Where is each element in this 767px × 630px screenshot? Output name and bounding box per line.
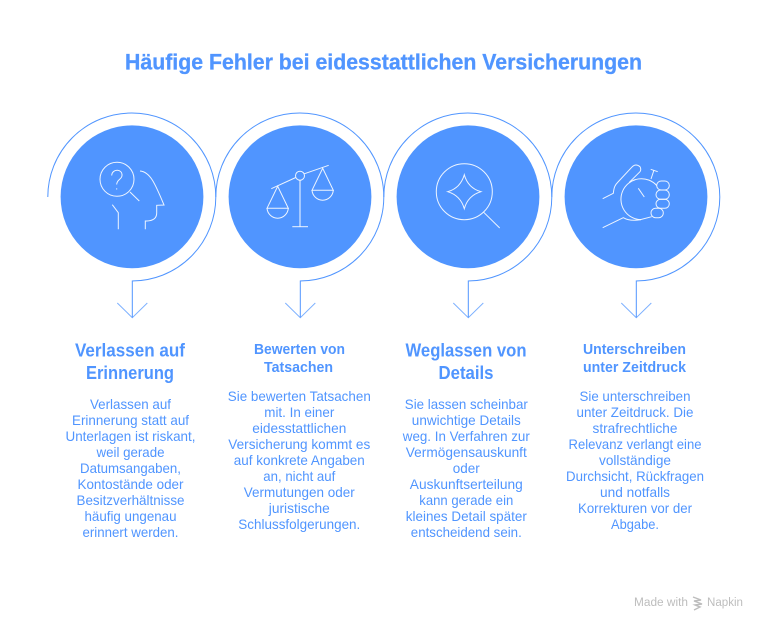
text block: Sie bewerten Tatsachen [228, 388, 371, 404]
icon: magnifier with star [436, 164, 500, 228]
text block: Kontostände oder [78, 476, 184, 492]
text block: Unterlagen ist riskant, [66, 428, 196, 444]
circle with arc and arrow [552, 113, 720, 318]
text block: an, nicht auf [263, 468, 335, 484]
text block: Sie unterschreiben [580, 388, 690, 404]
text block: erinnert werden. [82, 524, 178, 540]
circle with arc and arrow [48, 113, 216, 318]
text block: eidesstattlichen [252, 420, 346, 436]
heading: Erinnerung [86, 363, 174, 383]
heading: Weglassen von [406, 340, 526, 360]
icon: scales [267, 165, 333, 227]
panel: Verlassen auf Erinnerung [48, 113, 216, 540]
text block: Verlassen auf [90, 396, 171, 412]
text block: weg. In Verfahren zur [402, 428, 530, 444]
heading: Details [438, 363, 494, 383]
text block: Durchsicht, Rückfragen [566, 468, 704, 484]
text block: und notfalls [600, 484, 670, 500]
text block: Relevanz verlangt eine [568, 436, 702, 452]
icon: hand holding stopwatch [603, 165, 669, 228]
text block: oder [453, 460, 480, 476]
title: Häufige Fehler bei eidesstattlichen Versicherungen [125, 49, 642, 74]
circle with arc and arrow [216, 113, 384, 318]
heading [406, 340, 526, 383]
heading: unter Zeitdruck [583, 360, 687, 376]
text block: Versicherung kommt es [228, 436, 370, 452]
text block: vollständige [599, 452, 671, 468]
text block: unter Zeitdruck. Die [576, 404, 694, 420]
heading: Bewerten von [254, 342, 345, 358]
circle with arc and arrow [384, 113, 552, 318]
text block: Abgabe. [611, 516, 659, 532]
text block: auf konkrete Angaben [234, 452, 365, 468]
text block: häufig ungenau [84, 508, 176, 524]
panel: Weglassen von Details [384, 113, 552, 540]
text block: Datumsangaben, [80, 460, 181, 476]
text block: Besitzverhältnisse [76, 492, 185, 508]
footer: Made with Napkin: Napkin [707, 597, 743, 609]
text block: strafrechtliche [592, 420, 678, 436]
heading: Verlassen auf [75, 340, 186, 360]
text block: weil gerade [96, 444, 165, 460]
footer: Made with Napkin [634, 597, 743, 610]
heading [254, 342, 345, 376]
icon: head with question magnifier [100, 162, 164, 229]
text block [566, 388, 704, 532]
text block: Vermutungen oder [244, 484, 355, 500]
text block: Sie lassen scheinbar [405, 396, 528, 412]
text block: Auskunftserteilung [410, 476, 523, 492]
text block: entscheidend sein. [411, 524, 522, 540]
text block: Schlussfolgerungen. [238, 516, 360, 532]
text block: juristische [268, 500, 330, 516]
text block: Erinnerung statt auf [72, 412, 189, 428]
text block: unwichtige Details [412, 412, 521, 428]
text block: Korrekturen vor der [578, 500, 692, 516]
heading: Unterschreiben [583, 342, 686, 358]
text block: mit. In einer [264, 404, 335, 420]
panel: Unterschreiben unter Zeitdruck [552, 113, 720, 532]
heading: Tatsachen [264, 360, 333, 376]
panel: Bewerten von Tatsachen [216, 113, 384, 532]
text block [66, 396, 196, 540]
text block: kleines Detail später [406, 508, 527, 524]
text block: Vermögensauskunft [406, 444, 527, 460]
text block [228, 388, 371, 532]
text block: kann gerade ein [419, 492, 513, 508]
footer: Made with Napkin: Made with [634, 597, 688, 609]
text block [402, 396, 530, 540]
heading [583, 342, 687, 376]
heading [75, 340, 186, 383]
